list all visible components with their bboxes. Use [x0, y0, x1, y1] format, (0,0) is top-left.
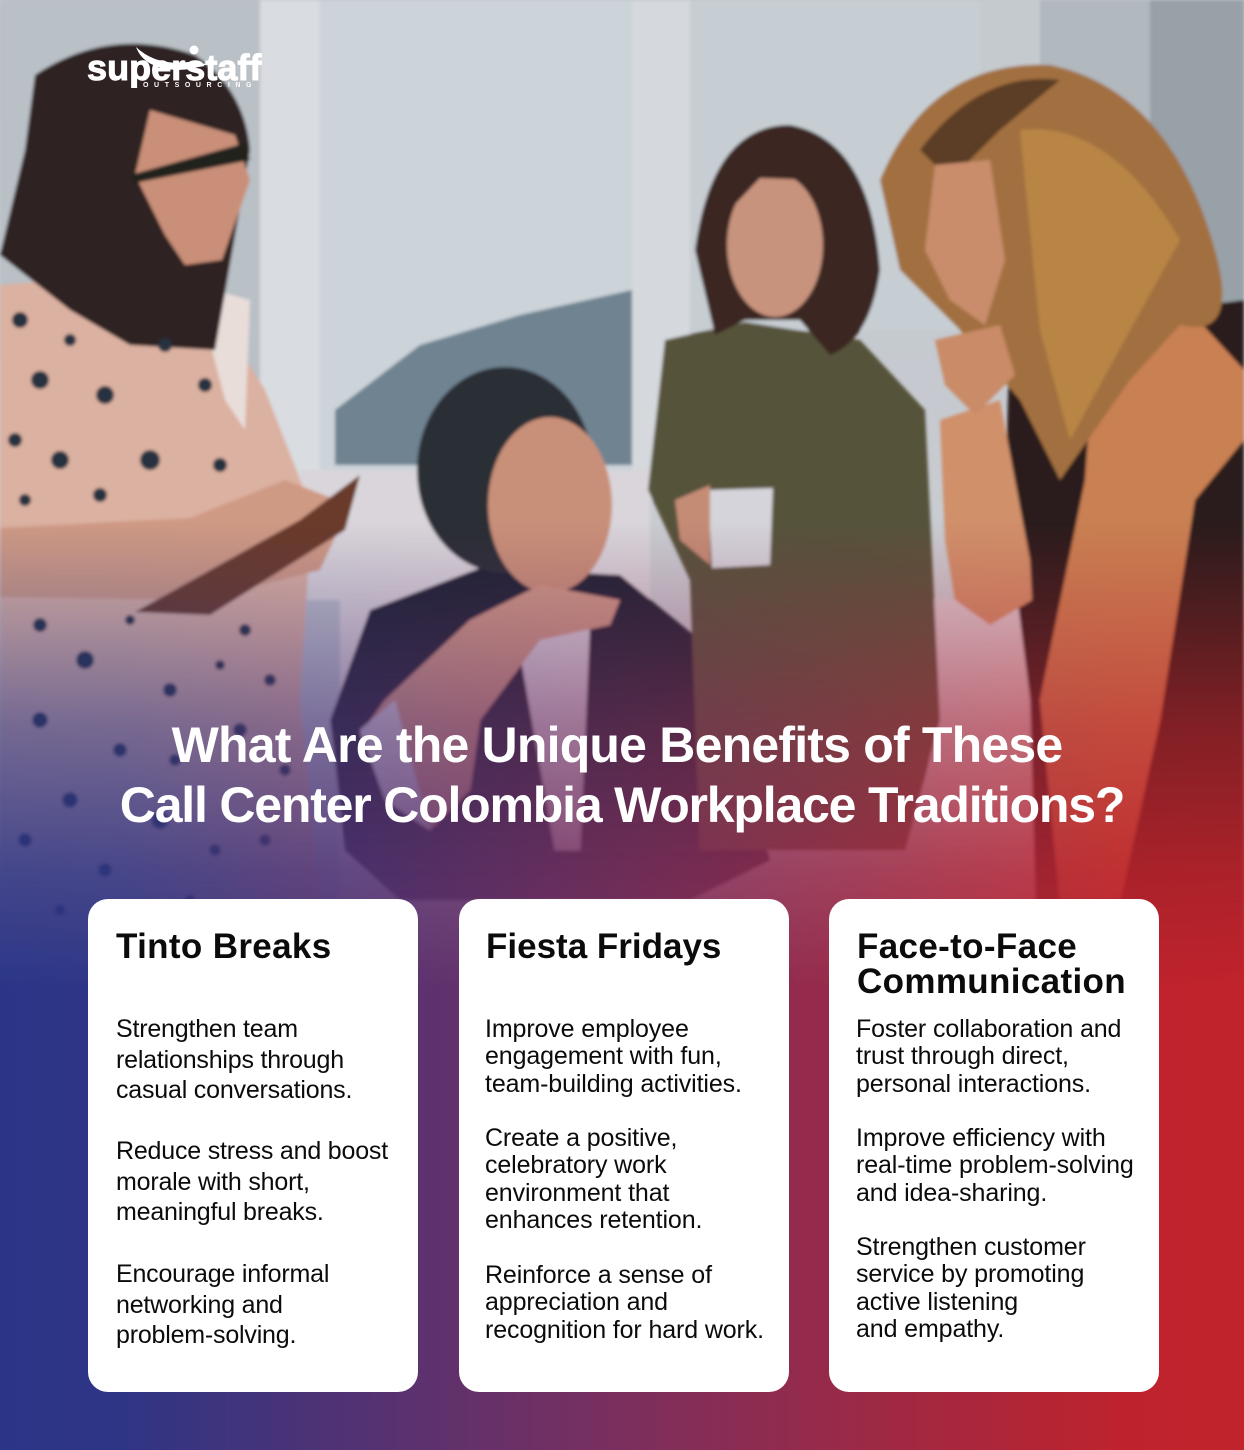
standing woman — [648, 322, 940, 850]
logo: OUTSOURCING — [143, 82, 257, 89]
text: Tinto benefit 1 — [116, 1015, 352, 1104]
text: Tinto benefit 1: Strengthen team — [116, 1015, 298, 1043]
text: Face-to-Face benefit 3 — [856, 1233, 1086, 1343]
text: Tinto benefit 1: casual conversations. — [116, 1076, 352, 1104]
panel: Fiesta Fridays — [459, 899, 789, 1392]
icon: logo swoosh and dot — [136, 46, 206, 70]
heading: Face-to-Face Communication: Communication — [857, 962, 1126, 1001]
text: Fiesta benefit 1: Improve employee — [485, 1015, 689, 1043]
text: Fiesta benefit 1 — [485, 1015, 742, 1098]
panel: Face-to-Face Communication — [829, 899, 1159, 1392]
text: Face-to-Face benefit 3: Strengthen customer — [856, 1233, 1086, 1261]
text: Face-to-Face benefit 2: and idea-sharing. — [856, 1179, 1047, 1207]
text: Face-to-Face benefit 1: trust through direct, — [856, 1042, 1069, 1070]
colour gradient overlay — [0, 539, 1244, 1450]
text: Fiesta benefit 2: Create a positive, — [485, 1124, 677, 1152]
text: Fiesta benefit 3: appreciation and — [485, 1288, 668, 1316]
text: Face-to-Face benefit 3: and empathy. — [856, 1315, 1004, 1343]
title: What Are the Unique Benefits of These — [172, 717, 1062, 773]
title — [120, 717, 1124, 833]
text: Tinto benefit 3: Encourage informal — [116, 1260, 329, 1288]
text: Tinto benefit 3: problem-solving. — [116, 1321, 296, 1349]
text: Fiesta benefit 3 — [485, 1261, 764, 1344]
left woman — [0, 280, 325, 950]
right woman — [1005, 300, 1244, 1100]
window frames — [0, 0, 260, 720]
text: Tinto benefit 2: Reduce stress and boost — [116, 1137, 388, 1165]
heading: Fiesta Fridays: Fiesta Fridays — [486, 927, 721, 966]
text: Tinto benefit 2 — [116, 1137, 388, 1226]
text: Tinto benefit 2: meaningful breaks. — [116, 1198, 324, 1226]
text: Face-to-Face benefit 1 — [856, 1015, 1121, 1098]
text: Face-to-Face benefit 1: personal interactions. — [856, 1070, 1091, 1098]
heading: Face-to-Face Communication — [857, 927, 1126, 1001]
text: Tinto benefit 3: networking and — [116, 1291, 283, 1319]
panel: Tinto Breaks — [88, 899, 418, 1392]
text: Tinto benefit 2: morale with short, — [116, 1168, 310, 1196]
text: Fiesta benefit 2: environment that — [485, 1179, 669, 1207]
text: Face-to-Face benefit 2 — [856, 1124, 1134, 1207]
title: Call Center Colombia Workplace Traditions? — [120, 777, 1124, 833]
seated woman — [330, 568, 770, 900]
text: Fiesta benefit 1: engagement with fun, — [485, 1042, 722, 1070]
text: Face-to-Face benefit 2: real-time problem-solving — [856, 1151, 1134, 1179]
text: Fiesta benefit 2: enhances retention. — [485, 1206, 702, 1234]
text: Fiesta benefit 2: celebratory work — [485, 1151, 666, 1179]
text: Fiesta benefit 1: team-building activities. — [485, 1070, 742, 1098]
text: Tinto benefit 1: relationships through — [116, 1046, 344, 1074]
heading: Tinto Breaks: Tinto Breaks — [116, 927, 332, 966]
text: Face-to-Face benefit 1: Foster collaboration and — [856, 1015, 1121, 1043]
text: Face-to-Face benefit 2: Improve efficiency with — [856, 1124, 1106, 1152]
text: Tinto benefit 3 — [116, 1260, 329, 1349]
logo: superstaff — [87, 47, 262, 88]
text: Fiesta benefit 3: Reinforce a sense of — [485, 1261, 712, 1289]
text: Face-to-Face benefit 3: service by promoting — [856, 1260, 1084, 1288]
text: Face-to-Face benefit 3: active listening — [856, 1288, 1018, 1316]
text: Fiesta benefit 3: recognition for hard work. — [485, 1316, 764, 1344]
text: Fiesta benefit 2 — [485, 1124, 702, 1234]
heading: Face-to-Face Communication: Face-to-Face — [857, 927, 1077, 966]
